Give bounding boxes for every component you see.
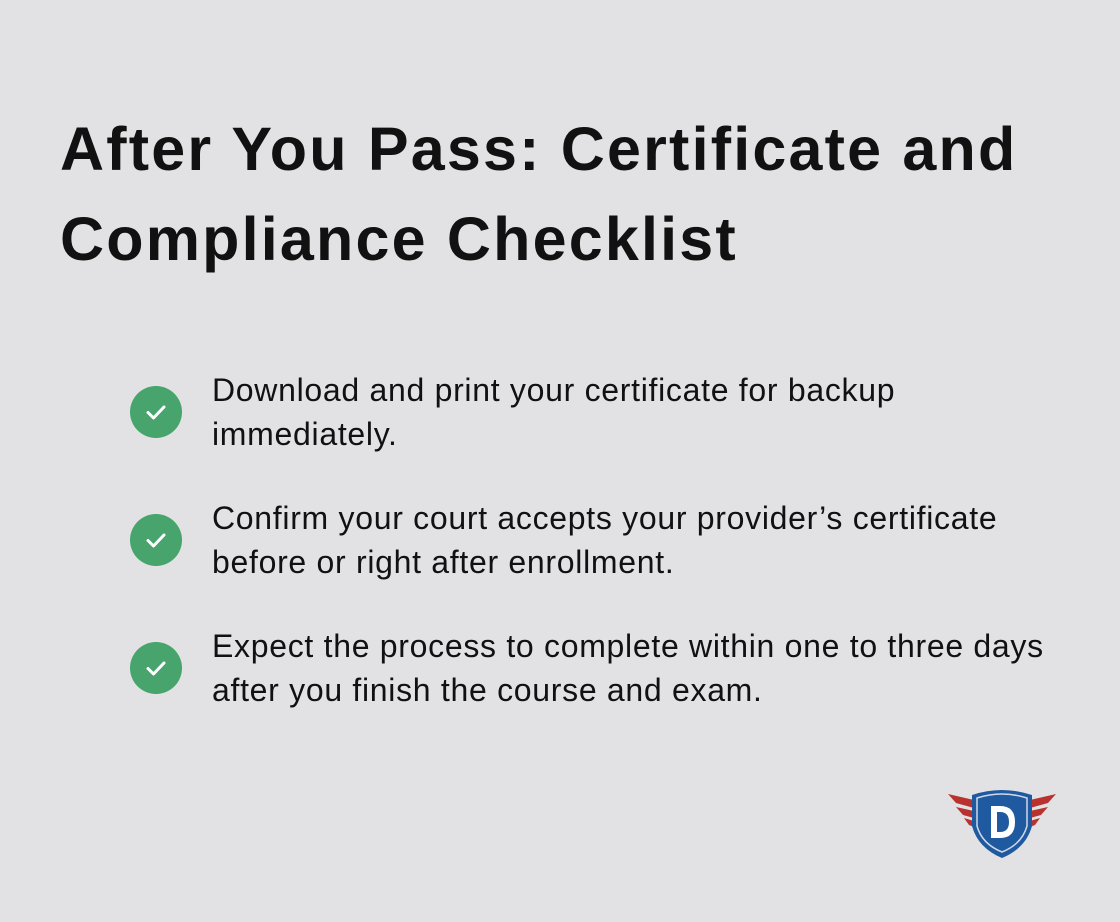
checklist item 1: immediately. <box>212 416 398 452</box>
title <box>60 115 1017 273</box>
title: Compliance Checklist <box>60 205 738 273</box>
icon: check <box>130 642 182 694</box>
checklist item 2 <box>130 500 997 580</box>
checklist item 1: Download and print your certificate for backup <box>212 372 895 408</box>
icon: check <box>130 386 182 438</box>
title: After You Pass: Certificate and <box>60 115 1017 183</box>
icon: check <box>130 514 182 566</box>
checklist item 3: after you finish the course and exam. <box>212 672 763 708</box>
checklist item 3 <box>130 628 1044 708</box>
checklist item 2: before or right after enrollment. <box>212 544 674 580</box>
checklist item 3: Expect the process to complete within one to three days <box>212 628 1044 664</box>
checklist item 2: Confirm your court accepts your provider’s certificate <box>212 500 997 536</box>
checklist item 1 <box>130 372 895 452</box>
logo <box>948 790 1056 858</box>
